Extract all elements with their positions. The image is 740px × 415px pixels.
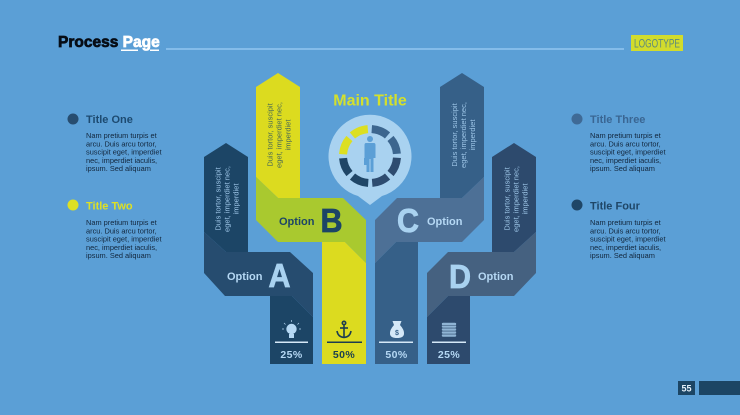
text block: title three: ipsum. Sed aliquam	[590, 164, 655, 173]
text block: title four: suscipit eget, imperdiet	[590, 235, 666, 244]
panel: option B: Duis tortor, suscipit	[266, 102, 274, 167]
text block: title four: nec, imperdiet iaculis,	[590, 243, 661, 252]
panel: option D: eget, imperdiet nec,	[512, 166, 520, 232]
text block: title three: nec, imperdiet iaculis,	[590, 156, 661, 165]
text block: title two	[68, 200, 162, 260]
panel: option B: eget, imperdiet nec,	[274, 102, 284, 168]
text block: title one: Nam pretium turpis et	[86, 131, 157, 140]
text block: title one	[68, 114, 162, 173]
text block: title one: Title One	[86, 114, 133, 126]
panel: option A: Duis tortor, suscipit	[214, 166, 222, 231]
panel: option A: A	[268, 257, 290, 294]
text block: title four: arcu. Duis arcu tortor,	[590, 226, 661, 235]
main title: Main Title	[333, 92, 407, 110]
footer bar	[699, 381, 740, 395]
panel: option D: D	[449, 258, 471, 295]
text block: title one: ipsum. Sed aliquam	[86, 164, 151, 173]
text block: title two: suscipit eget, imperdiet	[86, 235, 162, 244]
panel: option A: Option	[227, 271, 263, 283]
panel: option D	[427, 143, 536, 364]
icon: money bag	[390, 321, 404, 338]
icon: light bulb	[282, 320, 301, 338]
panel: option B	[256, 73, 366, 364]
icon: person	[364, 136, 376, 172]
text block: title one: suscipit eget, imperdiet	[86, 148, 162, 157]
panel: option D: Option	[478, 271, 514, 283]
page number: 55	[681, 384, 692, 394]
text block: title two: arcu. Duis arcu tortor,	[86, 226, 157, 235]
text block: title three: Title Three	[590, 114, 645, 126]
panel: option C	[375, 73, 484, 364]
text block: title two: ipsum. Sed aliquam	[86, 251, 151, 260]
text block: title three: suscipit eget, imperdiet	[590, 148, 666, 157]
text block: title two: nec, imperdiet iaculis,	[86, 243, 157, 252]
panel: option C: Duis tortor, suscipit	[450, 102, 459, 167]
text block: title two: Title Two	[86, 200, 133, 212]
text block: title three: Nam pretium turpis et	[590, 131, 661, 140]
icon: anchor	[337, 321, 351, 338]
text block: title one: nec, imperdiet iaculis,	[86, 156, 157, 165]
icon: money bag: $	[395, 330, 399, 337]
text block: title two: Nam pretium turpis et	[86, 218, 157, 227]
panel: option D: 25%	[438, 349, 460, 361]
logotype	[631, 35, 683, 51]
panel: option B: B	[320, 202, 342, 239]
panel: option C: 50%	[385, 349, 408, 361]
panel: option B: imperdiet	[284, 119, 292, 150]
panel: option D: imperdiet	[520, 183, 530, 214]
panel: option A	[204, 143, 313, 364]
panel: option A: eget, imperdiet nec,	[222, 166, 232, 232]
pin with ring and person	[328, 115, 412, 205]
panel: option C: imperdiet	[468, 119, 477, 150]
title: Process Page	[58, 34, 160, 51]
panel: option C: C	[397, 202, 419, 239]
text block: title four: Title Four	[590, 200, 641, 212]
panel: option A: imperdiet	[232, 183, 240, 214]
panel: option B: 50%	[333, 349, 355, 361]
text block: title three	[572, 114, 666, 173]
text block: title four	[572, 200, 666, 260]
text block: title one: arcu. Duis arcu tortor,	[86, 139, 157, 148]
page number	[678, 381, 695, 395]
header line	[166, 48, 624, 50]
panel: option B: Option	[279, 216, 315, 228]
text block: title four: Nam pretium turpis et	[590, 218, 661, 227]
panel: option C: eget, imperdiet nec,	[459, 102, 468, 168]
panel: option D: Duis tortor, suscipit	[502, 166, 512, 231]
icon: coin stack	[442, 322, 456, 337]
logotype: LOGOTYPE	[634, 38, 680, 50]
panel: option C: Option	[427, 216, 463, 228]
text block: title three: arcu. Duis arcu tortor,	[590, 139, 661, 148]
panel: option A: 25%	[280, 349, 303, 361]
text block: title four: ipsum. Sed aliquam	[590, 251, 655, 260]
